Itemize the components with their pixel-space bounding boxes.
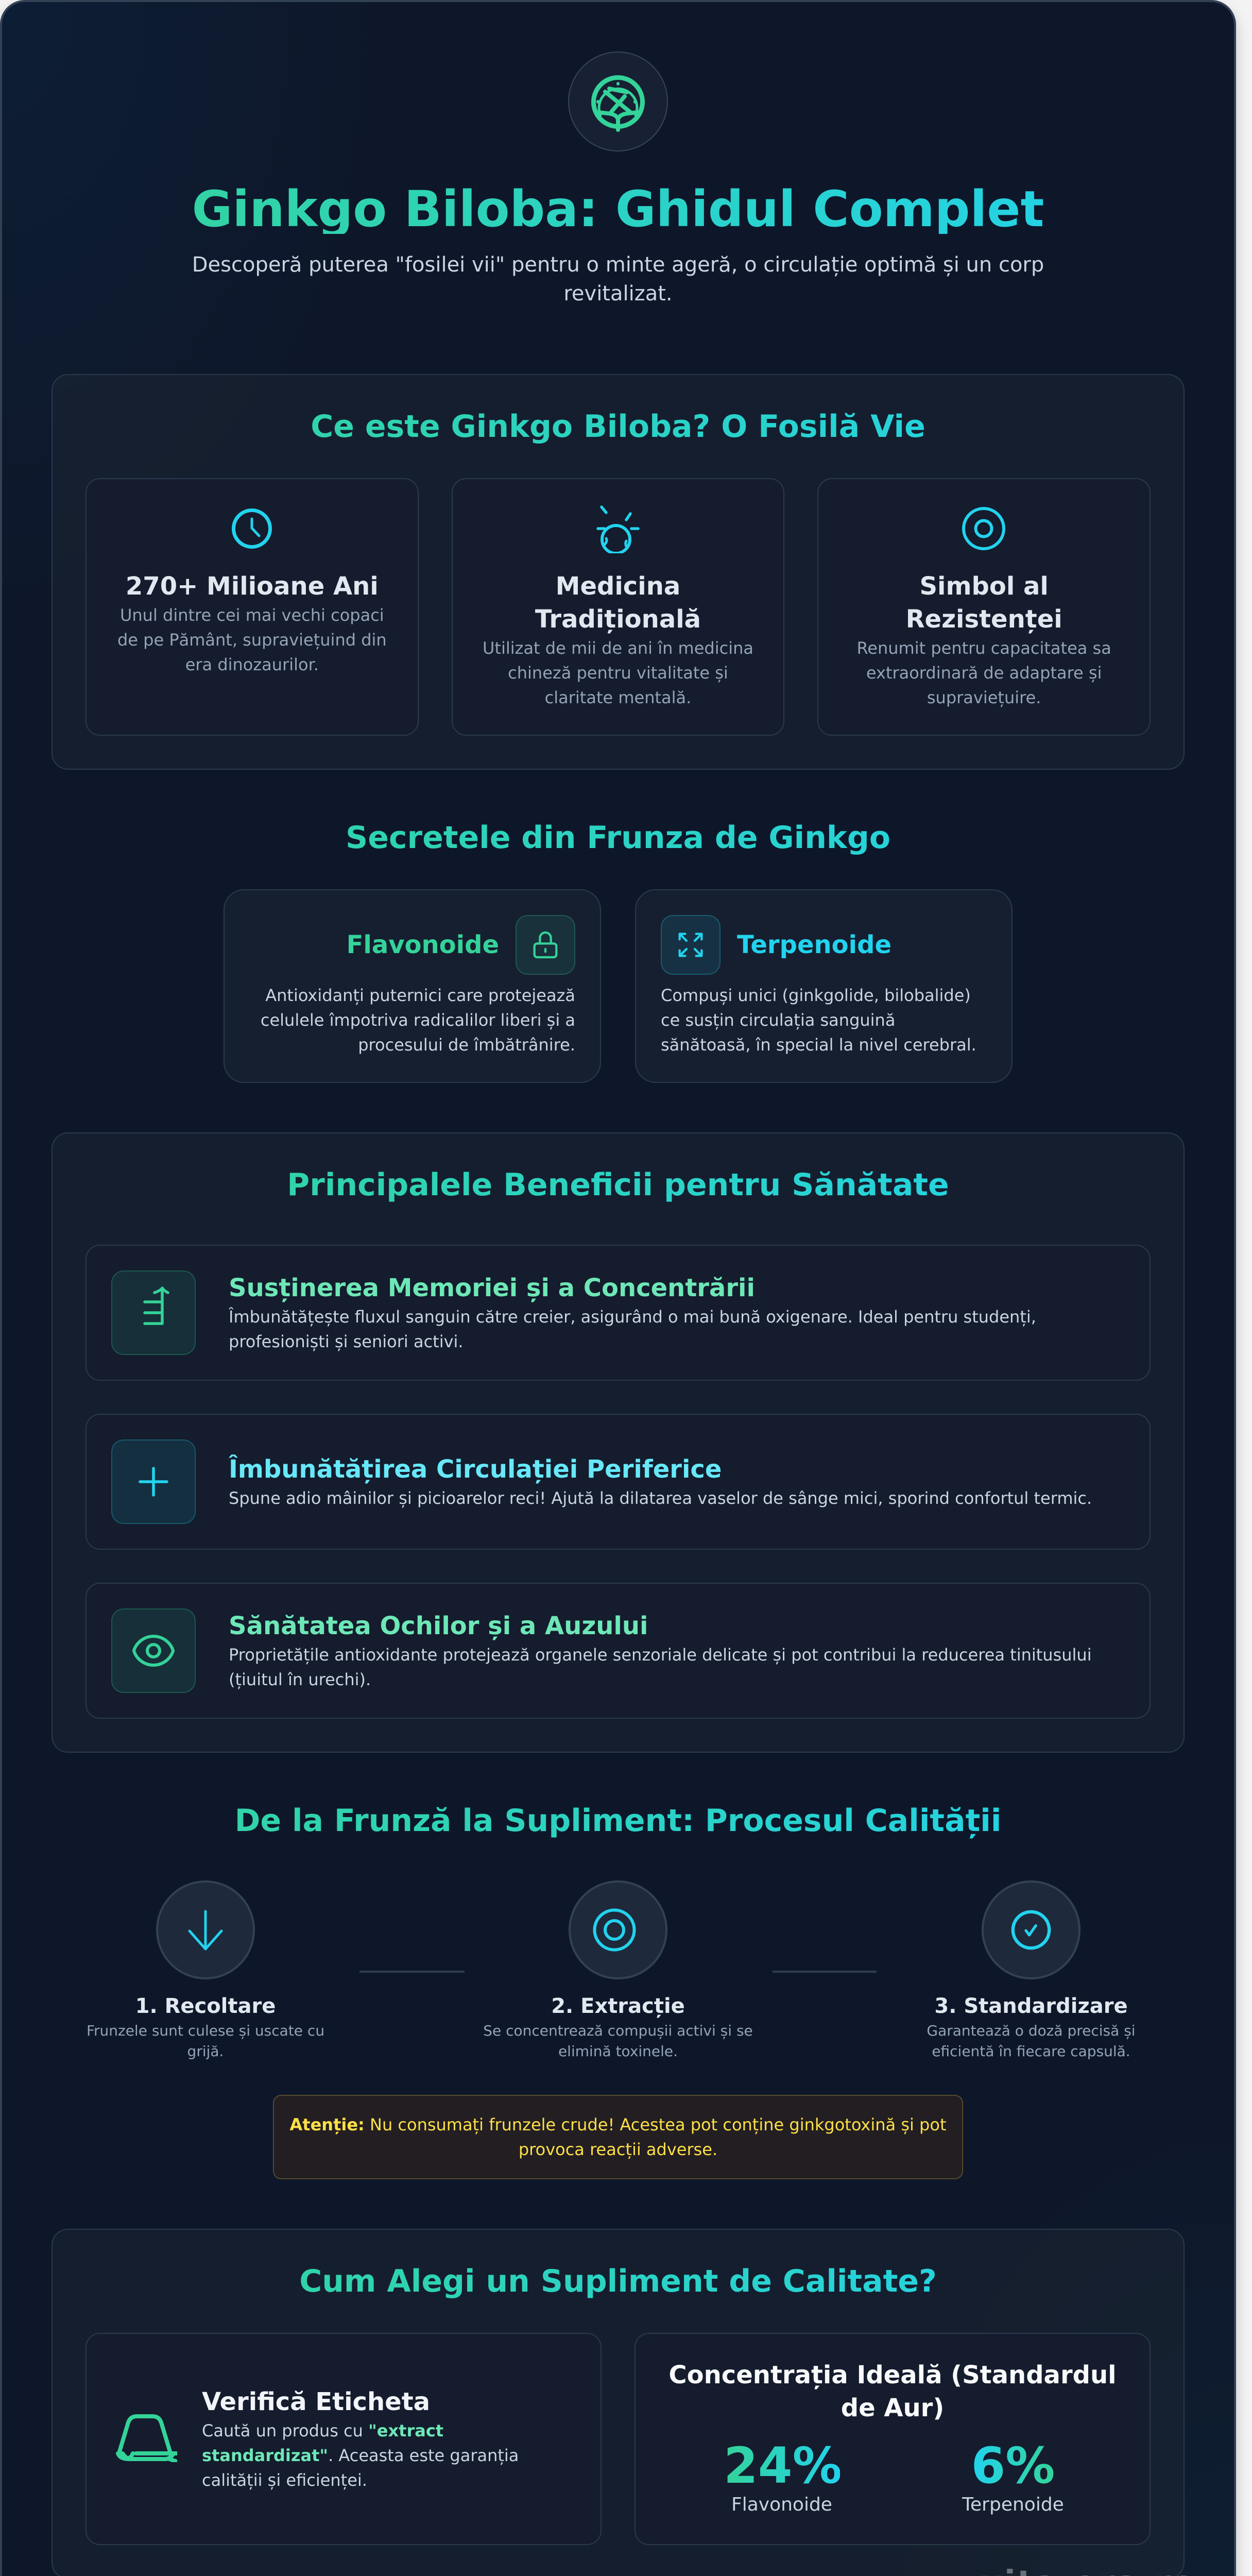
subtitle <box>192 253 1044 306</box>
card: 270+ million years <box>85 478 419 736</box>
step 2: extraction <box>483 1880 753 2060</box>
card text: de pe Pământ, supraviețuind din <box>117 630 387 650</box>
card: flavonoids <box>224 889 601 1083</box>
card title <box>906 572 1062 634</box>
description: calității și eficienței. <box>202 2470 367 2490</box>
card title: Simbol al <box>919 572 1049 601</box>
warning callout: Atenție: Nu consumați frunzele crude! Acestea pot conține ginkgotoxină și pot <box>290 2115 946 2134</box>
heading <box>85 1166 1151 1204</box>
card title: 270+ Milioane Ani <box>126 572 379 601</box>
connector line 2 <box>773 1971 877 1973</box>
description <box>229 1307 1036 1351</box>
step text: grijă. <box>187 2043 224 2060</box>
card text: era dinozaurilor. <box>185 655 319 674</box>
stat: 24% flavonoids <box>679 2441 885 2519</box>
title: Terpenoide <box>737 930 891 959</box>
description <box>661 986 976 1055</box>
card title: Rezistenței <box>906 605 1062 634</box>
title: Flavonoide <box>347 930 499 959</box>
description: procesului de îmbătrânire. <box>358 1035 575 1055</box>
step title: 3. Standardizare <box>934 1994 1128 2018</box>
icon: concentric rings <box>569 1880 667 1979</box>
card text: Unul dintre cei mai vechi copaci <box>120 605 384 625</box>
benefit: circulation <box>85 1414 1151 1550</box>
description <box>229 1645 1092 1689</box>
card text <box>856 638 1111 707</box>
heading: quality process: De la Frunză la Supliment: Procesul Calității <box>235 1803 1001 1839</box>
card: traditional medicine <box>452 478 784 736</box>
card text <box>483 638 753 707</box>
heading <box>85 2263 1151 2300</box>
heading: quality process <box>52 1802 1185 1839</box>
title: Îmbunătățirea Circulației Periferice <box>229 1455 722 1484</box>
description: Proprietățile antioxidante protejează organele senzoriale delicate și pot contribui la reducerea tinitusului <box>229 1645 1092 1665</box>
icon: eye <box>111 1608 196 1693</box>
subtitle: revitalizat. <box>563 282 673 306</box>
header logo: ginkgo emblem <box>568 52 668 151</box>
benefit: memory <box>85 1245 1151 1381</box>
card title: Medicina <box>556 572 680 601</box>
subtitle: Descoperă puterea "fosilei vii" pentru o minte ageră, o circulație optimă și un corp <box>192 253 1044 277</box>
step text: eficientă în fiecare capsulă. <box>932 2043 1130 2060</box>
icon: sun and brain <box>596 505 640 553</box>
card text: claritate mentală. <box>545 688 691 707</box>
icon: plus <box>111 1439 196 1524</box>
step text <box>483 2022 753 2060</box>
card text: Utilizat de mii de ani în medicina <box>483 638 753 658</box>
step text: Se concentrează compușii activi și se <box>483 2022 753 2039</box>
step text: Frunzele sunt culese și uscate cu <box>87 2022 324 2039</box>
description: Compuși unici (ginkgolide, bilobalide) <box>661 986 971 1005</box>
step text: elimină toxinele. <box>558 2043 678 2060</box>
label: Terpenoide <box>962 2494 1064 2515</box>
title: Susținerea Memoriei și a Concentrării <box>229 1274 755 1302</box>
icon: lock <box>516 915 575 975</box>
description: ce susțin circulația sanguină <box>661 1010 895 1030</box>
description: profesioniști și seniori activi. <box>229 1332 464 1351</box>
card text: chineză pentru vitalitate și <box>508 663 728 683</box>
icon: arrow down <box>156 1880 255 1979</box>
step title: 2. Extracție <box>551 1994 685 2018</box>
title: Verifică Eticheta <box>202 2387 430 2416</box>
description <box>261 986 575 1055</box>
card text: supraviețuire. <box>927 688 1041 707</box>
description: Caută un produs cu "extract <box>202 2421 443 2441</box>
card text <box>117 605 387 674</box>
icon: label <box>116 2414 177 2462</box>
icon: expand arrows <box>661 915 721 975</box>
card text: extraordinară de adaptare și <box>866 663 1102 683</box>
step text: Garantează o doză precisă și <box>927 2022 1136 2039</box>
heading: Principalele Beneficii pentru Sănătate <box>287 1167 949 1203</box>
description: standardizat". Aceasta este garanția <box>202 2446 519 2465</box>
card: symbol of resistance <box>817 478 1151 736</box>
step text <box>927 2022 1136 2060</box>
card: ideal concentration <box>634 2333 1151 2545</box>
heading: leaf secrets: Secretele din Frunza de Ginkgo <box>346 820 890 856</box>
card: terpenoids <box>635 889 1013 1083</box>
card text: Renumit pentru capacitatea sa <box>856 638 1111 658</box>
icon: ascending lines <box>111 1270 196 1355</box>
title: de Aur) <box>841 2394 944 2422</box>
icon: clock <box>232 509 272 549</box>
heading <box>85 408 1151 445</box>
step 1: harvesting <box>87 1880 324 2060</box>
heading: leaf secrets <box>52 819 1185 856</box>
panel: main health benefits <box>52 1132 1185 1753</box>
icon: target <box>962 507 1005 550</box>
title <box>634 2359 1151 2425</box>
label: Flavonoide <box>731 2494 832 2515</box>
description <box>202 2421 519 2490</box>
card title <box>535 572 701 634</box>
panel: what is ginkgo <box>52 374 1185 770</box>
step text <box>87 2022 324 2060</box>
heading: Cum Alegi un Supliment de Calitate? <box>299 2263 937 2299</box>
title: Concentrația Ideală (Standardul <box>668 2361 1117 2389</box>
value: 6% <box>971 2437 1055 2495</box>
heading: Ce este Ginkgo Biloba? O Fosilă Vie <box>311 409 925 445</box>
value: 24% <box>724 2437 842 2495</box>
warning callout: provoca reacții adverse. <box>519 2140 717 2159</box>
title: Sănătatea Ochilor și a Auzului <box>229 1612 648 1640</box>
stat: 6% terpenoids <box>910 2441 1116 2519</box>
description: (țiuitul în urechi). <box>229 1670 371 1689</box>
card title: Tradițională <box>535 605 701 634</box>
description: celulele împotriva radicalilor liberi și a <box>261 1010 575 1030</box>
description: Îmbunătățește fluxul sanguin către creier, asigurând o mai bună oxigenare. Ideal pentru studenți, <box>229 1307 1036 1327</box>
warning callout <box>273 2095 963 2179</box>
description: Antioxidanți puternici care protejează <box>265 986 575 1005</box>
description: sănătoasă, în special la nivel cerebral. <box>661 1035 976 1055</box>
description: Spune adio mâinilor și picioarelor reci! Ajută la dilatarea vaselor de sânge mici, sporind confortul termic. <box>229 1488 1092 1508</box>
benefit: eyes and hearing <box>85 1583 1151 1719</box>
panel: choosing a supplement <box>52 2229 1185 2576</box>
connector line 1 <box>359 1971 465 1973</box>
step 3: standardization <box>927 1880 1136 2060</box>
icon: check circle <box>982 1880 1081 1979</box>
card: check the label <box>85 2333 602 2545</box>
main title <box>52 184 1185 234</box>
main title: Ginkgo Biloba: Ghidul Complet <box>192 180 1044 238</box>
step title: 1. Recoltare <box>135 1994 276 2018</box>
